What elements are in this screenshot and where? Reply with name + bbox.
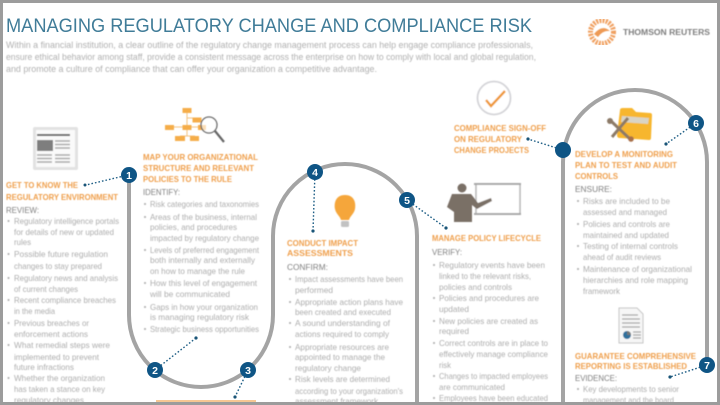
panel: develop a monitoring plan: maintained and updated [583,230,669,240]
panel: develop a monitoring plan: ahead of audit reviews [583,252,661,262]
marker 1: 1 [126,170,132,182]
panel: manage policy lifecycle: Employees have been educated [439,393,548,403]
panel: conduct impact assessments: Appropriate resources are [295,342,389,352]
marker 6: 6 [693,118,699,130]
panel: guarantee comprehensive reporting: GUARANTEE COMPREHENSIVE [575,352,697,361]
panel: conduct impact assessments [287,239,403,405]
marker 7: 7 [704,360,710,372]
panel: conduct impact assessments: been created and executed [295,307,391,317]
panel: manage policy lifecycle: risk [439,360,452,370]
panel: guarantee comprehensive reporting: EVIDENCE: [575,373,617,383]
panel: get to know the regulatory environment: Whether the organization [14,373,105,383]
panel: map your organizational structure: impacted by regulatory change [150,233,259,243]
panel: manage policy lifecycle [432,234,548,403]
panel: get to know the regulatory environment: GET TO KNOW THE [6,181,78,190]
panel: get to know the regulatory environment: enforcement actions [14,329,88,339]
panel: develop a monitoring plan: DEVELOP A MONITORING [575,150,673,159]
intro text: ensure ethical behavior among staff, provide a consistent message across the enterprise on how to comply with local and global regulation, [6,52,536,62]
panel: map your organizational structure: IDENTIFY: [143,187,180,197]
panel: develop a monitoring plan: PLAN TO TEST AND AUDIT [575,161,677,170]
panel: manage policy lifecycle: VERIFY: [432,247,462,257]
panel: map your organizational structure: STRUCTURE AND RELEVANT [143,164,254,173]
panel: map your organizational structure: on how to manage the rule [150,266,245,276]
intro text: Within a financial institution, a clear outline of the regulatory change management process can help engage compliance professionals, [6,40,533,50]
marker 3 [240,362,256,378]
icon: check mark badge [478,82,510,114]
marker 5 [399,192,415,208]
panel: get to know the regulatory environment: What remedial steps were [14,340,110,350]
panel: get to know the regulatory environment: Regulatory news and analysis [14,273,118,283]
panel: compliance sign-off: CHANGE PROJECTS [454,146,529,155]
intro text: and promote a culture of compliance that can offer your organization a competitive advantage. [6,64,377,74]
marker 5: 5 [404,195,410,207]
icon: report document [619,308,643,343]
logo: Thomson Reuters: THOMSON REUTERS [623,28,711,37]
panel: map your organizational structure [143,153,260,334]
panel: map your organizational structure: MAP YOUR ORGANIZATIONAL [143,153,258,162]
title: MANAGING REGULATORY CHANGE AND COMPLIANCE RISK [6,15,532,37]
panel: manage policy lifecycle: policies and controls [439,282,512,292]
panel: manage policy lifecycle: updated [439,304,469,314]
panel: develop a monitoring plan: ENSURE: [575,184,612,194]
panel: manage policy lifecycle: effectively manage compliance [439,349,548,359]
icon: presenter at board [447,184,521,222]
marker 3: 3 [245,365,251,377]
panel: get to know the regulatory environment: REVIEW: [6,205,39,215]
panel: map your organizational structure: POLICIES TO THE RULE [143,175,232,184]
panel: map your organizational structure: Levels of preferred engagement [150,245,260,255]
panel: map your organizational structure: will be communicated [149,289,230,299]
panel: conduct impact assessments: Appropriate action plans have [295,297,403,307]
panel: conduct impact assessments: according to your organization's [295,386,403,396]
panel: guarantee comprehensive reporting: REPORTING IS ESTABLISHED [575,362,687,371]
step markers [121,115,715,378]
panel: get to know the regulatory environment: changes to stay prepared [14,261,102,271]
panel: manage policy lifecycle: New policies are created as [439,316,538,326]
icon: folder with tools [607,108,652,142]
panel: manage policy lifecycle: Regulatory events have been [439,260,545,270]
panel: conduct impact assessments: ASSESSMENTS [287,249,354,258]
panel: get to know the regulatory environment: future infractions [14,362,74,372]
panel: get to know the regulatory environment [6,181,119,405]
marker 4 [307,164,323,180]
marker 1 [121,167,137,183]
panel: get to know the regulatory environment: in the media [14,306,55,316]
panel: manage policy lifecycle: required [439,326,469,336]
panel: manage policy lifecycle: Correct controls are in place to [439,338,548,348]
panel: get to know the regulatory environment: implemented to prevent [14,352,100,362]
panel: get to know the regulatory environment: REGULATORY ENVIRONMENT [6,193,118,202]
panel: map your organizational structure: Strategic business opportunities [150,324,259,334]
panel: map your organizational structure: Gaps in how your organization [150,302,258,312]
panel: manage policy lifecycle: are communicated [439,382,505,392]
icon: org chart with magnifier [165,108,224,142]
panel: get to know the regulatory environment: rules [14,237,31,247]
panel: develop a monitoring plan: CONTROLS [575,172,618,181]
panel: conduct impact assessments: Impact assessments have been [295,274,403,284]
panel: develop a monitoring plan: hierarchies and role mapping [583,275,688,285]
panel: map your organizational structure: is managing regulatory risk [150,312,250,322]
intro text [6,40,536,74]
panel: compliance sign-off: ON REGULATORY [454,135,523,144]
panel: develop a monitoring plan: Maintenance of organizational [583,264,692,274]
panel: manage policy lifecycle: linked to the relevant risks, [439,271,531,281]
panel: conduct impact assessments: actions required to comply [295,329,390,339]
logo: Thomson Reuters [590,20,711,44]
panel: get to know the regulatory environment: of current changes [14,284,78,294]
marker 2 [147,362,163,378]
panel: develop a monitoring plan: Policies and controls are [583,219,670,229]
panel: conduct impact assessments: performed [295,285,333,295]
panel: get to know the regulatory environment: Possible future regulation [14,249,108,259]
panel: guarantee comprehensive reporting: management and the board [583,395,674,405]
panel: get to know the regulatory environment: regulatory changes [14,395,84,405]
marker 2: 2 [152,365,158,377]
panel: conduct impact assessments: regulatory change [295,363,361,373]
panel: develop a monitoring plan: framework [583,286,621,296]
process path [129,90,707,405]
panel: guarantee comprehensive reporting [575,352,697,405]
marker 7 [699,357,715,373]
panel: manage policy lifecycle: Changes to impacted employees [439,371,548,381]
panel: guarantee comprehensive reporting: Key developments to senior [583,384,679,394]
marker 6 [688,115,704,131]
panel: map your organizational structure: How this level of engagement [150,278,258,288]
panel: conduct impact assessments: appointed to manage the [295,352,385,362]
panel: map your organizational structure: both internally and externally [150,255,256,265]
panel: conduct impact assessments: CONDUCT IMPACT [287,239,358,248]
panel: get to know the regulatory environment: Previous breaches or [14,318,89,328]
panel: manage policy lifecycle: Policies and procedures are [439,293,539,303]
panel: map your organizational structure: policies, and procedures [150,222,237,232]
panel: manage policy lifecycle: MANAGE POLICY LIFECYCLE [432,234,541,243]
panel: map your organizational structure: Risk categories and taxonomies [150,199,259,209]
panel: conduct impact assessments: CONFIRM: [287,262,328,272]
sign-off marker [555,142,571,158]
panel: develop a monitoring plan: assessed and managed [583,207,667,217]
panel: conduct impact assessments: Risk levels are determined [295,374,390,384]
panel: map your organizational structure: Areas of the business, internal [150,212,257,222]
panel: develop a monitoring plan [575,150,692,296]
panel: compliance sign-off [454,124,546,155]
marker 4: 4 [312,167,318,179]
panel: develop a monitoring plan: Risks are included to be [583,196,670,206]
connector end dots [84,137,672,399]
cut-off heading at bottom edge [156,400,256,402]
panel: get to know the regulatory environment: has taken a stance on key [14,384,106,394]
icon: newspaper [33,127,78,170]
panel: develop a monitoring plan: Testing of internal controls [583,241,678,251]
panel: compliance sign-off: COMPLIANCE SIGN-OFF [454,124,546,133]
dotted connectors [86,123,707,397]
icon: light bulb [335,195,355,227]
panel: get to know the regulatory environment: Regulatory intelligence portals [14,216,119,226]
panel: get to know the regulatory environment: for details of new or updated [14,227,114,237]
panel: get to know the regulatory environment: Recent compliance breaches [14,295,116,305]
panel: conduct impact assessments: A sound understanding of [295,318,391,328]
